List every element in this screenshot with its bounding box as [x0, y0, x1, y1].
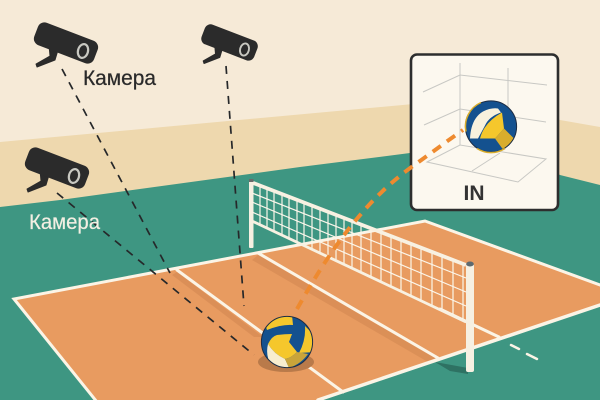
net top band: [252, 182, 466, 265]
camera lens: [239, 42, 250, 57]
ball base: [465, 100, 517, 152]
IN label: IN: [464, 182, 484, 205]
court: [14, 221, 600, 400]
camera body: [199, 23, 260, 62]
ball shadow: [258, 352, 314, 372]
post shadow: [435, 362, 468, 374]
shaded lower panel: [285, 352, 308, 368]
right post cap: [466, 262, 474, 266]
camera mount: [203, 44, 222, 64]
camera lens: [76, 43, 90, 59]
yellow rim bottom: [477, 148, 505, 153]
orange ball trajectory: [297, 130, 463, 309]
yellow right panel: [299, 326, 313, 353]
cream panel: [470, 108, 501, 138]
court surface: [14, 221, 600, 400]
camera label light: Камера: [29, 211, 100, 234]
line shadows: [172, 255, 438, 362]
camera top centre: [199, 23, 260, 64]
cream lower panel: [267, 344, 288, 368]
wall and floor grid: [423, 63, 547, 182]
ball base: [261, 316, 313, 368]
ball outline: [261, 316, 313, 368]
camera lens: [67, 168, 81, 184]
yellow rim left: [465, 102, 481, 132]
teal floor: [0, 141, 600, 400]
ball rim: [465, 101, 517, 152]
ball: [261, 314, 315, 370]
volleyball net: [249, 179, 474, 372]
yellow centre panel: [268, 334, 297, 359]
card frame: [411, 54, 558, 210]
ball in card: [465, 100, 517, 153]
wall tan band: [0, 96, 600, 220]
inset card: [411, 54, 558, 210]
camera mount: [36, 45, 58, 67]
court lines: [14, 221, 600, 400]
ball on court: [258, 314, 315, 372]
camera top left: [32, 20, 100, 67]
yellow strip: [495, 128, 515, 150]
camera mount: [27, 170, 49, 192]
left post cap: [249, 179, 254, 182]
left post: [249, 180, 254, 248]
camera left: [23, 145, 91, 192]
camera sight lines: [57, 66, 254, 355]
net mesh: [252, 186, 466, 321]
net bottom band: [252, 221, 466, 322]
yellow top panel: [266, 316, 293, 330]
camera body: [23, 145, 91, 191]
yellow panel: [480, 112, 504, 138]
right post: [466, 264, 474, 372]
camera label dark: Камера: [83, 67, 156, 90]
camera body: [32, 20, 100, 66]
